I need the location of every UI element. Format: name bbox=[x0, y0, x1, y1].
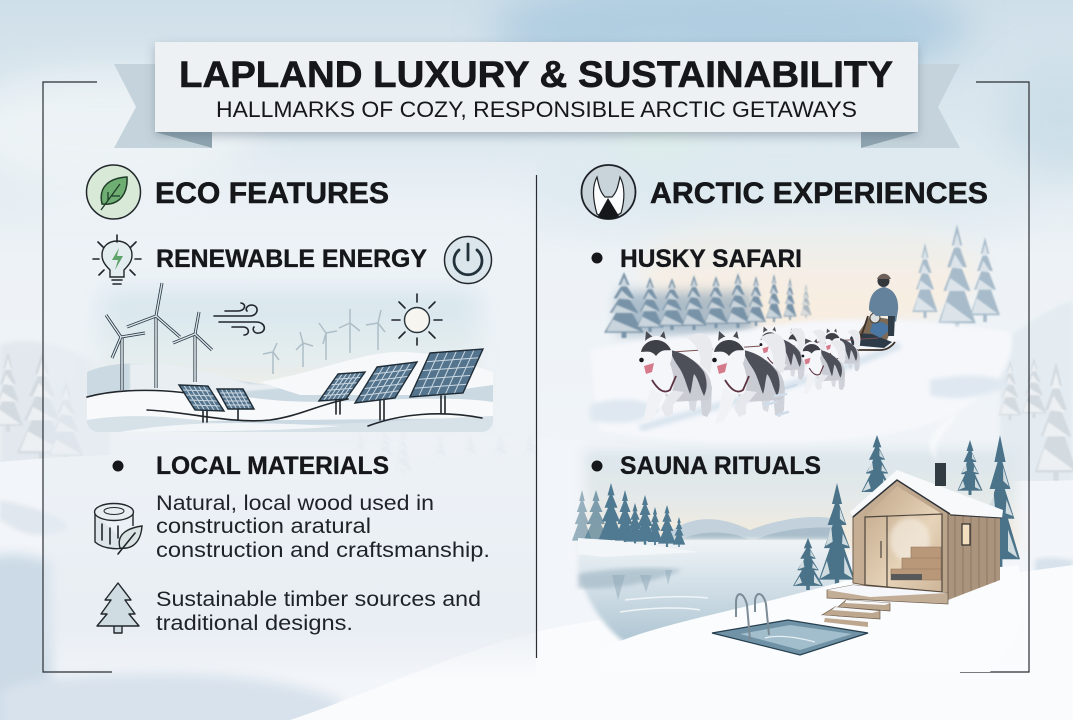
panel: eco features bbox=[86, 165, 493, 635]
steam bbox=[930, 412, 956, 462]
sauna scene bbox=[572, 412, 1023, 672]
background trees bbox=[793, 435, 1020, 590]
sauna rituals bullet bbox=[592, 460, 602, 472]
deck and steps bbox=[822, 585, 948, 627]
panel: left tint bbox=[43, 150, 536, 680]
paw prints bbox=[765, 385, 796, 415]
husky safari bullet bbox=[592, 252, 602, 264]
sled dog team bbox=[639, 327, 878, 424]
subtitle: HALLMARKS OF COZY, RESPONSIBLE ARCTIC GETAWAYS bbox=[216, 97, 857, 122]
icon: log and leaf bbox=[94, 504, 142, 554]
icon: pine tree bbox=[97, 583, 139, 633]
pool ladder bbox=[736, 594, 769, 640]
local materials bullet bbox=[112, 460, 124, 472]
heading: eco features: ECO FEATURES bbox=[155, 177, 389, 210]
icon: leaf bbox=[86, 165, 140, 219]
title banner bbox=[114, 42, 960, 148]
icon: power button bbox=[444, 236, 492, 284]
text: natural wood: Natural, local wood used in bbox=[156, 492, 434, 515]
wind turbines bbox=[106, 283, 212, 390]
snow slope bbox=[590, 320, 1012, 444]
distant turbines bbox=[263, 309, 385, 374]
heading: renewable energy: RENEWABLE ENERGY bbox=[156, 245, 427, 273]
cabin roof bbox=[850, 470, 1003, 518]
solar panels bbox=[179, 349, 483, 422]
text: sustainable timber bbox=[156, 588, 481, 635]
ice plunge pool bbox=[712, 620, 868, 655]
chimney bbox=[935, 463, 946, 486]
renewable energy scene bbox=[87, 283, 493, 432]
panel: arctic experiences bbox=[572, 165, 1023, 672]
icon: light bulb bbox=[93, 235, 141, 284]
wind lines bbox=[214, 303, 264, 335]
back band bbox=[87, 364, 493, 432]
frame lines bbox=[43, 82, 1029, 672]
ribbon tail right bbox=[861, 64, 960, 148]
text: natural wood: construction and craftsmanship. bbox=[156, 539, 490, 562]
cabin window bbox=[962, 524, 970, 545]
musher bbox=[869, 274, 898, 336]
ribbon tail left bbox=[114, 64, 212, 148]
forest bbox=[618, 292, 753, 334]
text: natural wood: construction aratural bbox=[156, 515, 371, 538]
ground contour bbox=[87, 390, 482, 426]
horizon sky bbox=[585, 450, 1017, 550]
title: LAPLAND LUXURY & SUSTAINABILITY bbox=[179, 54, 893, 95]
husky safari scene bbox=[590, 208, 1012, 444]
foreground snow bbox=[600, 565, 1023, 672]
front snow bbox=[87, 389, 493, 422]
heading: husky safari: HUSKY SAFARI bbox=[620, 245, 802, 273]
text: natural wood bbox=[156, 492, 490, 562]
heading: arctic experiences: ARCTIC EXPERIENCES bbox=[650, 177, 988, 210]
text: sustainable timber: traditional designs. bbox=[156, 612, 353, 635]
lake shore trees bbox=[572, 483, 685, 547]
sauna cabin bbox=[850, 412, 1003, 600]
sled bbox=[850, 313, 895, 350]
text: sustainable timber: Sustainable timber sources and bbox=[156, 588, 481, 611]
heading: sauna rituals: SAUNA RITUALS bbox=[620, 452, 821, 480]
banner plate bbox=[155, 42, 918, 132]
sun bbox=[392, 294, 442, 345]
frozen lake bbox=[578, 539, 840, 650]
icon: arctic badge bbox=[582, 165, 636, 219]
heading: local materials: LOCAL MATERIALS bbox=[156, 452, 389, 480]
distant hills bbox=[660, 517, 840, 540]
